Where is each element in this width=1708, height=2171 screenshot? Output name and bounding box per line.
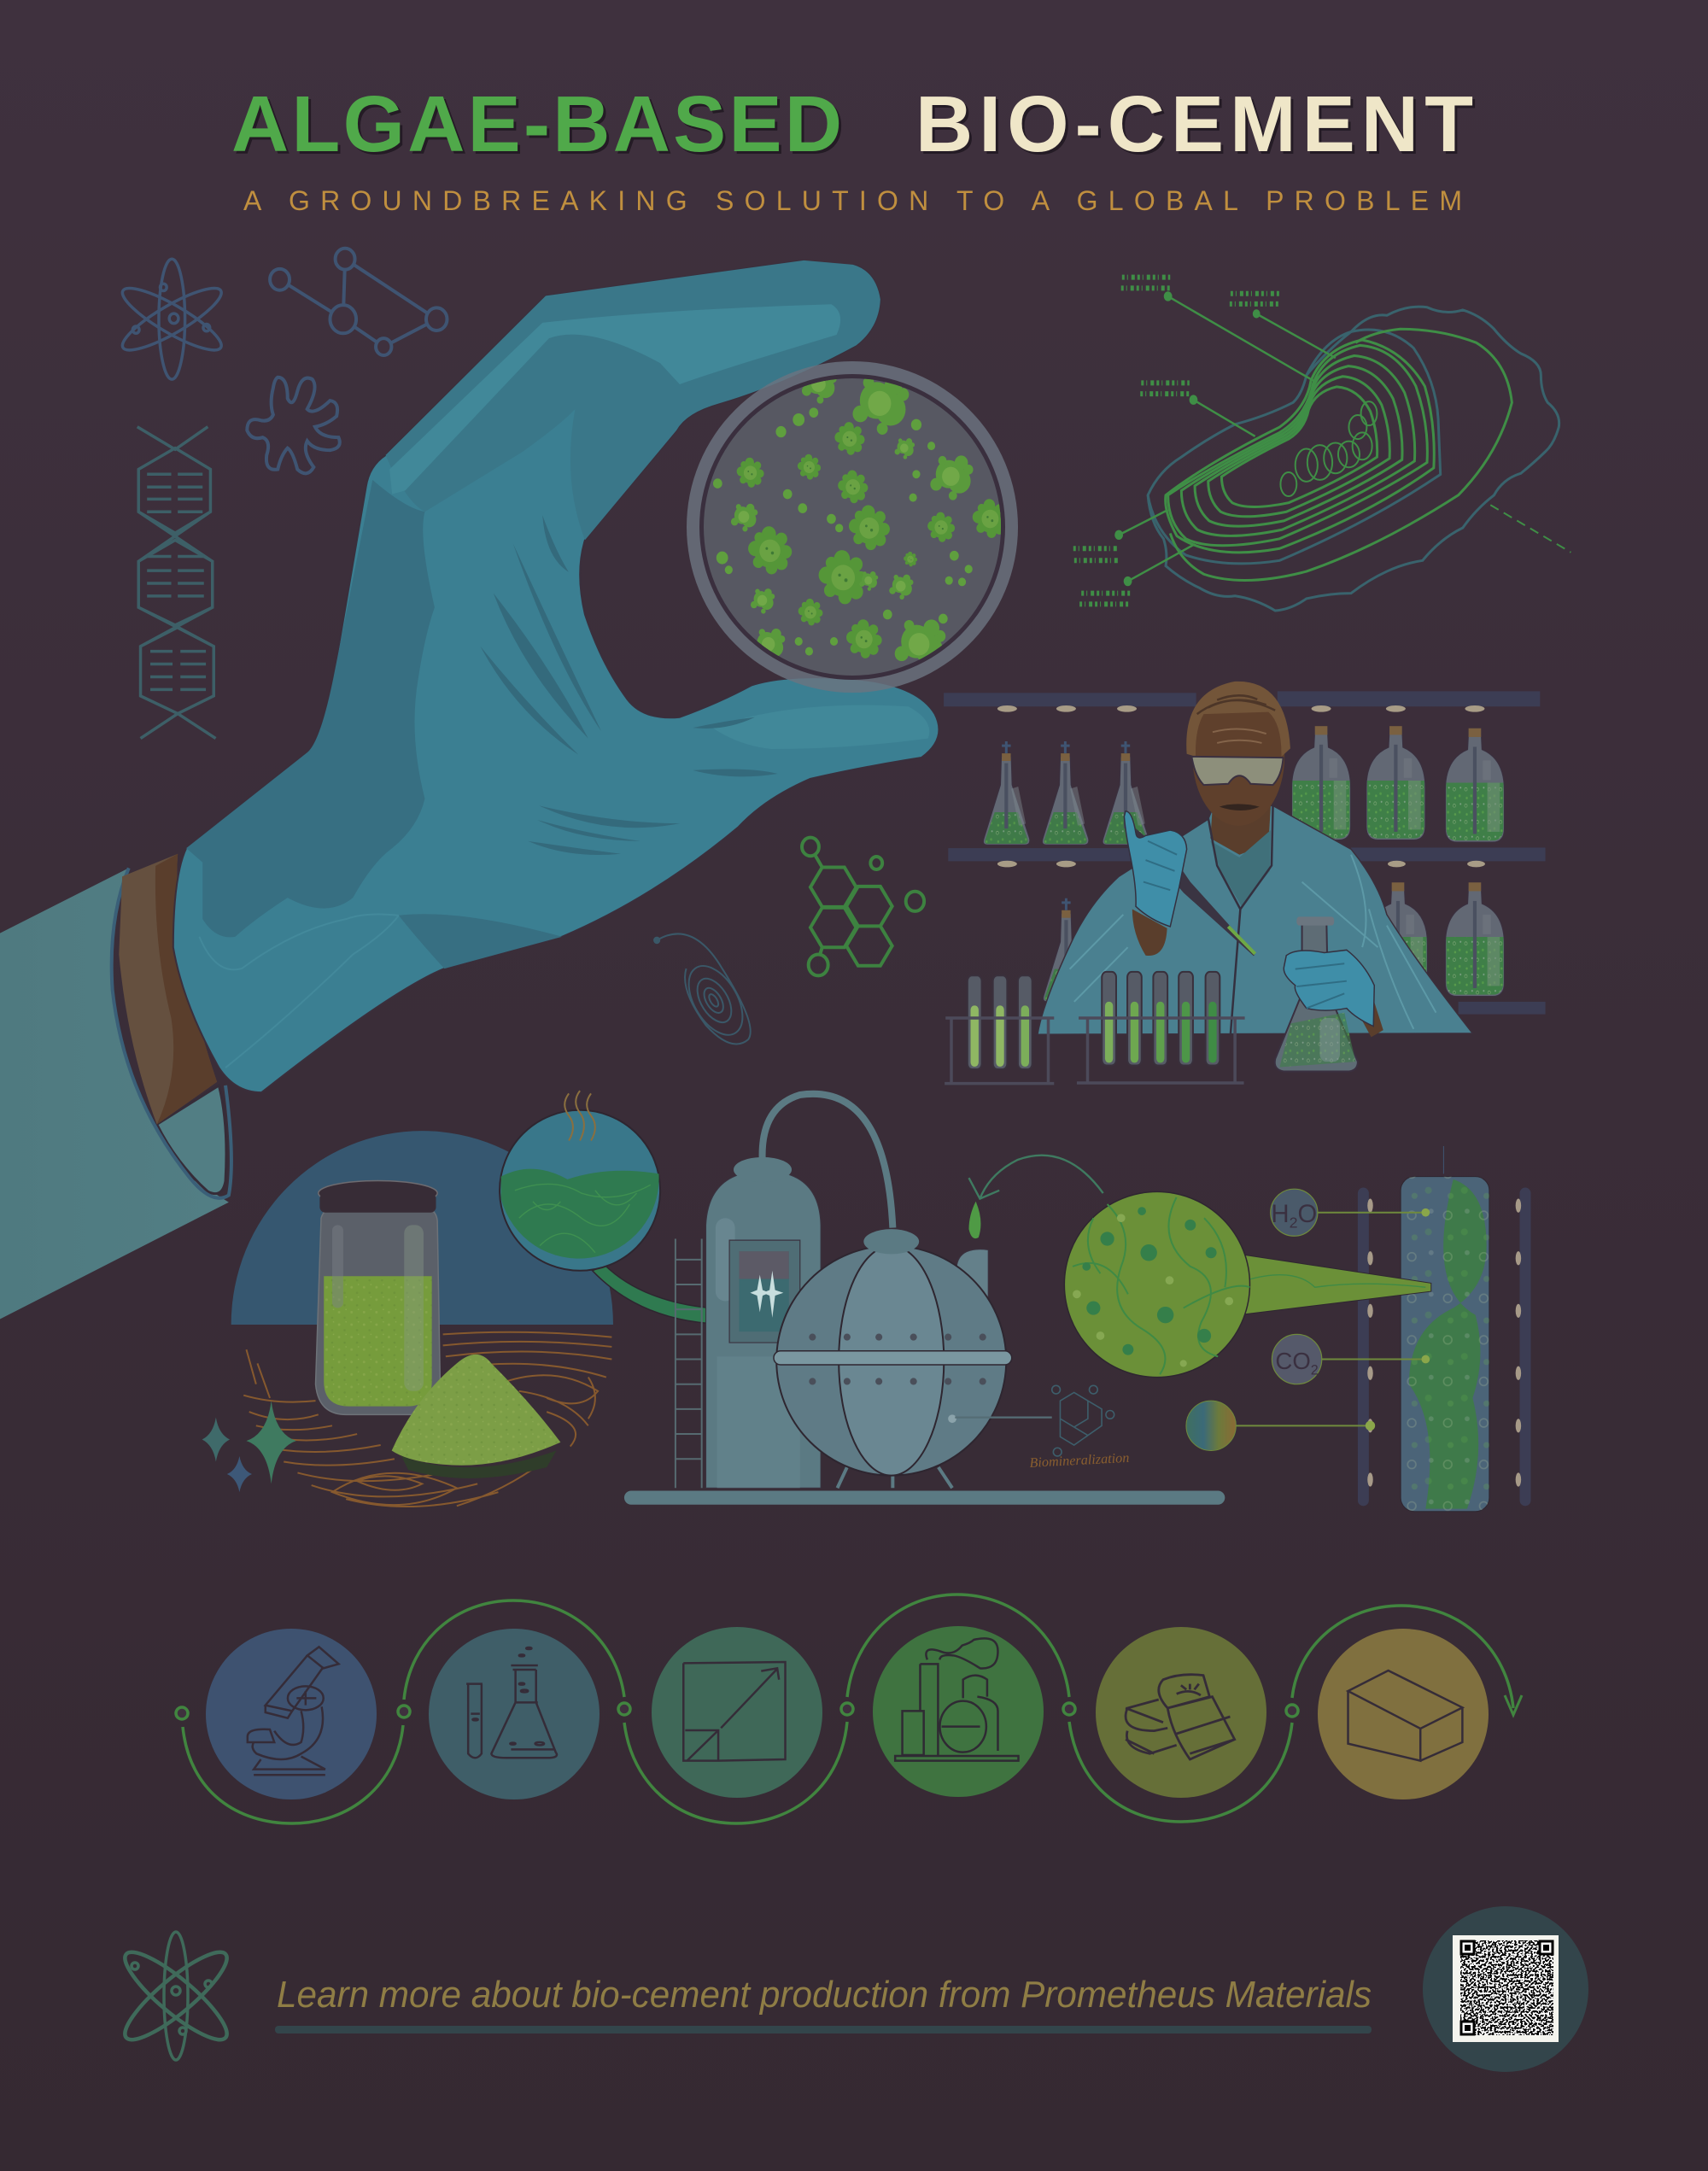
spiral galaxy icon xyxy=(654,933,753,1045)
CO2 input xyxy=(1272,1334,1430,1384)
head and hair xyxy=(1192,688,1284,826)
glass jar xyxy=(316,1180,440,1414)
petri dish xyxy=(687,361,1018,693)
shelves xyxy=(944,691,1546,1015)
scientist scene xyxy=(944,682,1546,1084)
step 4: factory xyxy=(873,1626,1044,1797)
H2O input: O xyxy=(1298,1201,1317,1228)
dashed axis line xyxy=(1490,505,1571,553)
sparkles xyxy=(202,1401,296,1492)
process steps timeline xyxy=(176,1595,1522,1823)
side rails with lights xyxy=(1358,1188,1530,1506)
step connector nodes xyxy=(176,1703,1298,1719)
QR code xyxy=(1423,1906,1588,2072)
honeycomb molecule icon xyxy=(802,838,924,975)
curved arrow xyxy=(968,1156,1103,1199)
hand illustration xyxy=(0,249,939,1320)
jugs on shelf xyxy=(1292,726,1504,997)
amoeba icon xyxy=(247,377,340,473)
cell outer membrane xyxy=(1148,307,1559,611)
cell label lines xyxy=(1115,293,1336,585)
culture bubble with steam xyxy=(500,1091,754,1325)
step 2: lab glassware xyxy=(429,1629,600,1799)
DNA helix icon xyxy=(137,427,216,739)
right test tube rack xyxy=(1077,972,1245,1083)
CO2 input: 2 xyxy=(1311,1362,1319,1378)
goggles xyxy=(1191,757,1284,785)
H2O input: 2 xyxy=(1290,1214,1298,1232)
cell diagram xyxy=(1073,278,1571,611)
ladder xyxy=(676,1239,702,1488)
title xyxy=(231,79,1473,168)
network icon xyxy=(270,249,447,355)
magnified culture circle xyxy=(1064,1191,1431,1378)
footer atom icon xyxy=(115,1932,237,2060)
cell annotations xyxy=(1073,278,1279,604)
left test tube rack xyxy=(945,975,1054,1084)
reactor tower xyxy=(706,1094,988,1488)
shelf lights xyxy=(997,705,1485,867)
wrist xyxy=(119,854,217,1124)
algae colonies xyxy=(713,367,1008,672)
glove fold lines xyxy=(480,515,778,855)
CO2 input: CO xyxy=(1275,1348,1311,1374)
H2O input xyxy=(1271,1189,1430,1236)
algae column xyxy=(1401,1146,1489,1512)
step 6: finished brick xyxy=(1318,1629,1489,1799)
cell inner wall xyxy=(1148,330,1441,564)
reactor sphere xyxy=(774,1229,1012,1488)
blue dome backdrop xyxy=(231,1131,613,1325)
subtitle: A GROUNDBREAKING SOLUTION TO A GLOBAL PROBLEM xyxy=(243,185,1462,216)
scientist xyxy=(1038,682,1472,1072)
flasks on shelf xyxy=(983,741,1149,1002)
lab coat sleeve xyxy=(0,868,231,1320)
green drop xyxy=(968,1202,980,1238)
step connector arcs xyxy=(183,1595,1522,1823)
title: ALGAE-BASED xyxy=(231,79,842,168)
biomineralization molecule xyxy=(955,1385,1114,1456)
base bar xyxy=(624,1490,1225,1505)
title: BIO-CEMENT xyxy=(915,79,1473,168)
powder pile xyxy=(392,1355,560,1478)
production illustration xyxy=(202,1091,1530,1512)
step 1: microscope xyxy=(206,1629,377,1799)
footer call to action: Learn more about bio-cement production from Prometheus Materials xyxy=(277,1974,1372,2016)
step 5: cement blocks xyxy=(1096,1627,1266,1798)
flask in hand xyxy=(1275,922,1358,1072)
H2O input: H xyxy=(1272,1201,1290,1228)
blue glove xyxy=(173,260,939,1092)
wood grain xyxy=(243,1332,611,1507)
biomineralization label: Biomineralization xyxy=(1029,1450,1130,1471)
step 3: scale-up chart xyxy=(652,1627,822,1798)
gloved hand with pipette xyxy=(1132,909,1167,956)
small atom icon xyxy=(117,259,227,379)
light spectrum input xyxy=(1186,1401,1375,1450)
cell chloroplast lamellae xyxy=(1166,329,1512,580)
footer underline xyxy=(275,2026,1372,2033)
